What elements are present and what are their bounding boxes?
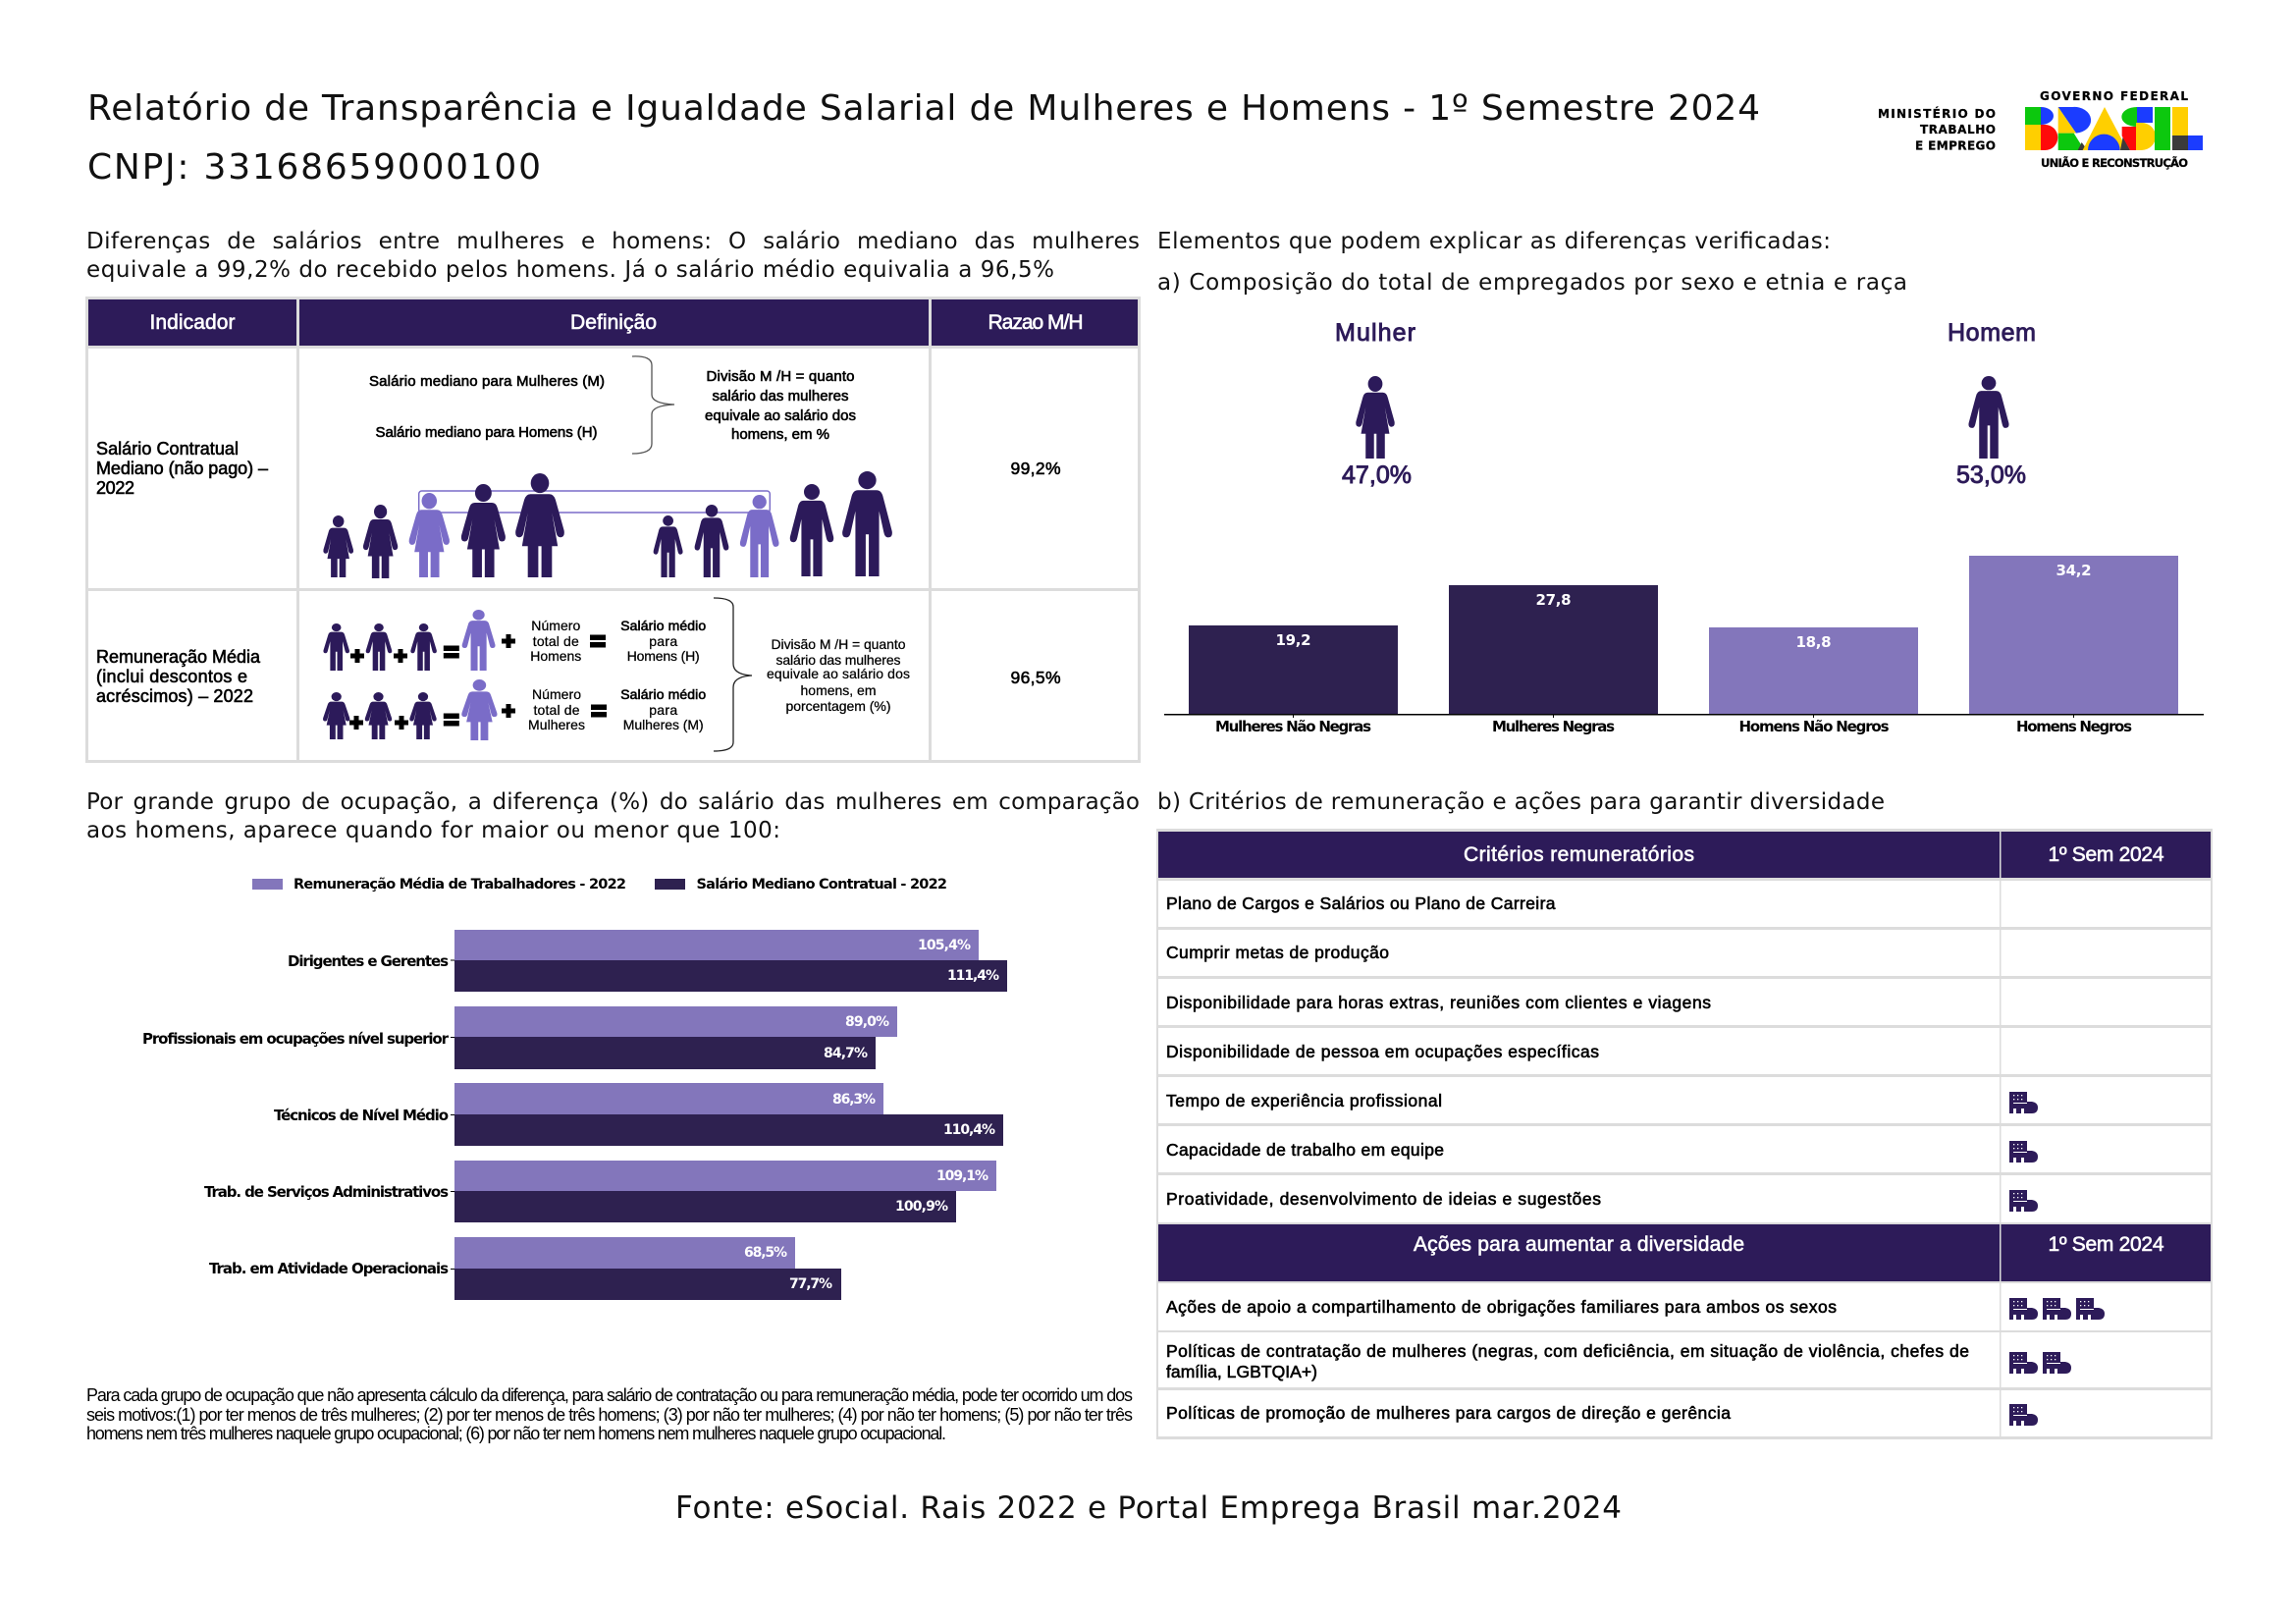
text block: diferenças de salários: equivale a 99,2% do recebido pelos homens. Já o salário médio equivalia a 96,5% <box>86 257 1054 283</box>
ações header: Ações para aumentar a diversidade <box>1414 1233 1744 1256</box>
critérios rows <box>1166 893 1711 1209</box>
panel: tabela critérios e ações <box>1156 829 2213 1439</box>
definition: mediano labels <box>369 373 605 441</box>
text: divisão mediano: equivale ao salário dos <box>705 407 856 424</box>
equation: mulheres: Número <box>532 686 581 702</box>
bar: homens não negros <box>1709 627 1918 735</box>
row label: remuneração média <box>96 647 261 706</box>
heading: elementos: Elementos que podem explicar as diferenças verificadas: <box>1157 229 1831 254</box>
icon: woman <box>1356 376 1395 459</box>
critérios rows: Disponibilidade de pessoa em ocupações específicas <box>1166 1042 1599 1061</box>
critérios rows: Disponibilidade para horas extras, reuniões com clientes e viagens <box>1166 993 1711 1012</box>
panel: mulher: 47,0% <box>1342 461 1412 489</box>
text: divisão mediano <box>705 368 856 443</box>
equation: mulheres: total de <box>534 702 580 718</box>
table header: Indicador <box>149 311 236 334</box>
row label: remuneração média: (inclui descontos e <box>96 667 247 686</box>
definition: mediano labels: Salário mediano para Mulheres (M) <box>369 373 605 390</box>
group: serviços administrativos: 100,9% <box>895 1199 948 1215</box>
footnote <box>86 1385 1133 1443</box>
group: dirigentes e gerentes: 105,4% <box>918 938 971 953</box>
text block: diferenças de salários: Diferenças de salários entre mulheres e homens: O salário mediano das mulheres <box>86 229 1140 254</box>
bar: homens não negros: Homens Não Negros <box>1739 718 1890 735</box>
bar: mulheres não negras <box>1189 625 1398 735</box>
group: atividade operacionais: 68,5% <box>744 1245 787 1261</box>
bar: mulheres negras <box>1449 585 1658 735</box>
group: dirigentes e gerentes: 111,4% <box>947 968 999 984</box>
footnote: seis motivos:(1) por ter menos de três mulheres; (2) por ter menos de três homens; (3) por não ter mulheres; (4) por não ter homens; (5) por não ter três <box>86 1405 1133 1425</box>
critérios rows: Tempo de experiência profissional <box>1166 1091 1442 1110</box>
title: CNPJ: 33168659000100 <box>87 147 541 188</box>
row label: remuneração média: Remuneração Média <box>96 647 261 667</box>
text block: diferenças de salários <box>86 229 1140 283</box>
legend: Remuneração Média de Trabalhadores - 2022 <box>294 877 626 893</box>
panel: mulher <box>1335 319 1415 489</box>
bar: homens não negros: 18,8 <box>1796 633 1832 651</box>
title <box>87 88 1760 188</box>
text block: por grande grupo: aos homens, aparece quando for maior ou menor que 100: <box>86 818 780 843</box>
bar chart: composição <box>1164 556 2204 735</box>
group: técnicos: Técnicos de Nível Médio <box>274 1107 449 1124</box>
group: profissionais: Profissionais em ocupações nível superior <box>142 1030 450 1048</box>
panel: homem: Homem <box>1948 319 2036 347</box>
equation: mulheres: Salário médio <box>620 686 706 702</box>
group: dirigentes e gerentes <box>288 930 1007 992</box>
heading: composição: a) Composição do total de empregados por sexo e etnia e raça <box>1157 270 1907 296</box>
bar: mulheres negras: 27,8 <box>1535 591 1571 609</box>
panel: homem <box>1948 319 2036 489</box>
critérios rows: Proatividade, desenvolvimento de ideias e sugestões <box>1166 1189 1601 1209</box>
text block: por grande grupo: Por grande grupo de ocupação, a diferença (%) do salário das mulheres em comparação <box>86 789 1140 815</box>
definition: mediano labels: Salário mediano para Homens (H) <box>375 424 597 441</box>
group: dirigentes e gerentes: Dirigentes e Gerentes <box>288 952 449 970</box>
critérios header: 1º Sem 2024 <box>2048 843 2164 866</box>
bar: homens negros: 34,2 <box>2056 562 2091 579</box>
ações rows: Ações de apoio a compartilhamento de obrigações familiares para ambos os sexos <box>1166 1297 1837 1317</box>
critérios rows: Cumprir metas de produção <box>1166 943 1389 962</box>
bar: homens negros <box>1969 556 2178 735</box>
text: divisão média: salário das mulheres <box>775 652 901 668</box>
ações rows: Políticas de contratação de mulheres (negras, com deficiência, em situação de violência, chefes de <box>1166 1341 1969 1361</box>
row label: salário contratual: Mediano (não pago) – <box>96 459 268 478</box>
text: divisão média <box>767 636 910 714</box>
logo: governo federal brasil: UNIÃO E RECONSTRUÇÃO <box>2041 155 2188 170</box>
group: técnicos: 86,3% <box>832 1092 876 1108</box>
bar: homens negros: Homens Negros <box>2016 718 2132 735</box>
legend: Salário Mediano Contratual - 2022 <box>697 877 947 893</box>
logo: ministério do trabalho <box>1878 106 1996 153</box>
table header <box>88 299 1138 346</box>
ações rows <box>1166 1297 1969 1423</box>
critérios header <box>1158 832 2211 878</box>
row label: salário contratual: Salário Contratual <box>96 439 239 459</box>
group: profissionais: 89,0% <box>845 1014 889 1030</box>
bar: mulheres não negras: 19,2 <box>1276 631 1311 649</box>
panel: tabela indicador <box>85 297 1141 763</box>
equation: mulheres: Mulheres <box>528 717 585 732</box>
highlight box: medianas <box>419 491 770 513</box>
group: atividade operacionais: Trab. em Atividade Operacionais <box>209 1260 449 1277</box>
brace: mediano <box>632 356 674 454</box>
icons: empresas ações <box>2009 1298 2105 1426</box>
ações rows: Políticas de promoção de mulheres para cargos de direção e gerência <box>1166 1403 1731 1423</box>
logo: ministério do trabalho: MINISTÉRIO DO <box>1878 106 1996 121</box>
group: técnicos: 110,4% <box>943 1122 995 1138</box>
text block: por grande grupo <box>86 789 1140 843</box>
value 99,2%: 99,2% <box>1011 459 1060 478</box>
equation: homens: Homens (H) <box>627 648 700 664</box>
logo: ministério do trabalho: TRABALHO <box>1920 123 1996 136</box>
group: atividade operacionais: 77,7% <box>789 1276 832 1292</box>
footnote: Para cada grupo de ocupação que não apresenta cálculo da diferença, para salário de contratação ou para remuneração média, pode ter ocorrido um dos <box>86 1385 1133 1405</box>
bar chart: ocupação <box>142 877 1007 1300</box>
text: divisão média: homens, em <box>801 682 876 698</box>
value 96,5%: 96,5% <box>1011 668 1060 687</box>
icons: homens ordenados <box>654 471 892 577</box>
equation: homens: total de <box>533 633 579 649</box>
title: Relatório de Transparência e Igualdade Salarial de Mulheres e Homens - 1º Semestre 2024 <box>87 88 1760 129</box>
icons: empresas critérios <box>2009 1092 2038 1212</box>
equation: homens <box>323 610 706 671</box>
heading: critérios: b) Critérios de remuneração e ações para garantir diversidade <box>1157 789 1885 815</box>
group: profissionais <box>142 1006 897 1069</box>
table header: Razao M/H <box>988 311 1084 334</box>
logo: ministério do trabalho: E EMPREGO <box>1915 139 1996 153</box>
text: divisão mediano: salário das mulheres <box>713 388 848 405</box>
text: divisão mediano: Divisão M /H = quanto <box>707 368 854 385</box>
equation: homens: Homens <box>530 648 581 664</box>
group: serviços administrativos: 109,1% <box>936 1168 988 1184</box>
text: divisão média: Divisão M /H = quanto <box>772 636 906 652</box>
brace: média <box>714 598 752 751</box>
equation: mulheres <box>323 679 706 740</box>
ações header: 1º Sem 2024 <box>2048 1233 2164 1256</box>
group: profissionais: 84,7% <box>824 1046 868 1061</box>
icons: mulheres ordenadas <box>323 473 564 578</box>
bar: mulheres não negras: Mulheres Não Negras <box>1215 718 1371 735</box>
ações header <box>1158 1224 2211 1281</box>
group: serviços administrativos <box>204 1161 996 1222</box>
legend <box>252 877 947 893</box>
source line: Fonte: eSocial. Rais 2022 e Portal Emprega Brasil mar.2024 <box>675 1490 1622 1526</box>
critérios header: Critérios remuneratórios <box>1464 843 1694 866</box>
group: atividade operacionais <box>209 1237 841 1300</box>
panel: mulher: Mulher <box>1335 319 1415 347</box>
logo: governo federal brasil <box>2025 89 2203 170</box>
text: divisão média: porcentagem (%) <box>785 698 891 714</box>
equation: homens: para <box>649 633 677 649</box>
table header: Definição <box>570 311 657 334</box>
critérios rows: Plano de Cargos e Salários ou Plano de Carreira <box>1166 893 1556 913</box>
text: divisão média: equivale ao salário dos <box>767 666 910 681</box>
equation: mulheres: para <box>649 702 677 718</box>
critérios rows: Capacidade de trabalho em equipe <box>1166 1140 1444 1160</box>
logo: governo federal brasil: GOVERNO FEDERAL <box>2040 89 2188 103</box>
icon: man <box>1968 376 2009 459</box>
equation: mulheres: Mulheres (M) <box>623 717 704 732</box>
text: divisão mediano: homens, em % <box>731 426 829 443</box>
equation: homens: Salário médio <box>620 618 706 633</box>
panel: homem: 53,0% <box>1956 461 2026 489</box>
group: técnicos <box>274 1083 1003 1146</box>
row label: salário contratual: 2022 <box>96 478 134 498</box>
group: serviços administrativos: Trab. de Serviços Administrativos <box>204 1183 449 1201</box>
bar: mulheres negras: Mulheres Negras <box>1492 718 1615 735</box>
equation: homens: Número <box>531 618 581 633</box>
row label: salário contratual <box>96 439 268 498</box>
footnote: homens nem três mulheres naquele grupo ocupacional; (6) por não ter nem homens nem mulheres naquele grupo ocupacional. <box>86 1424 946 1443</box>
row label: remuneração média: acréscimos) – 2022 <box>96 686 253 706</box>
ações rows: família, LGBTQIA+) <box>1166 1362 1317 1381</box>
